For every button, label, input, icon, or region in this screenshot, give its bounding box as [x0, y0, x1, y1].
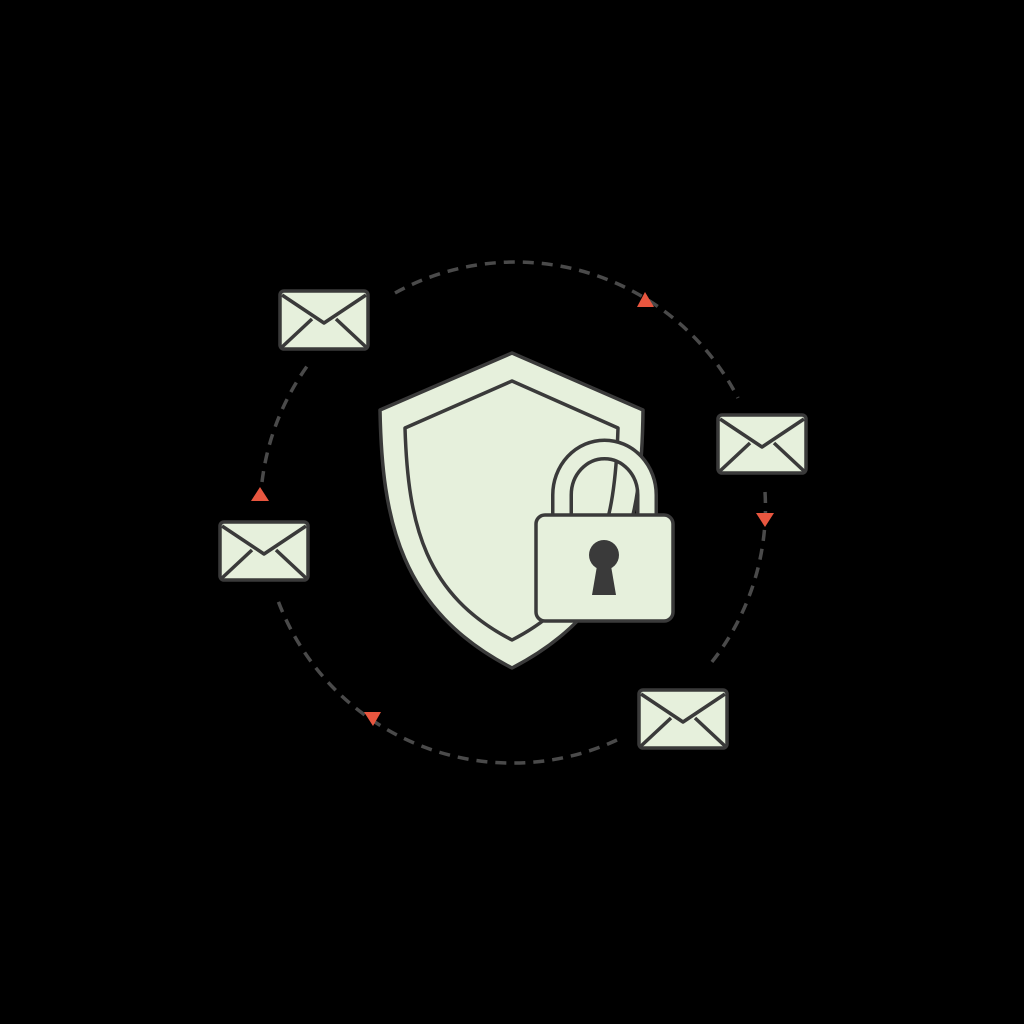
arrows [251, 292, 774, 726]
envelopes [220, 291, 806, 748]
dashed cycle arcs [262, 262, 765, 763]
padlock [536, 449, 673, 621]
shield [380, 353, 643, 668]
